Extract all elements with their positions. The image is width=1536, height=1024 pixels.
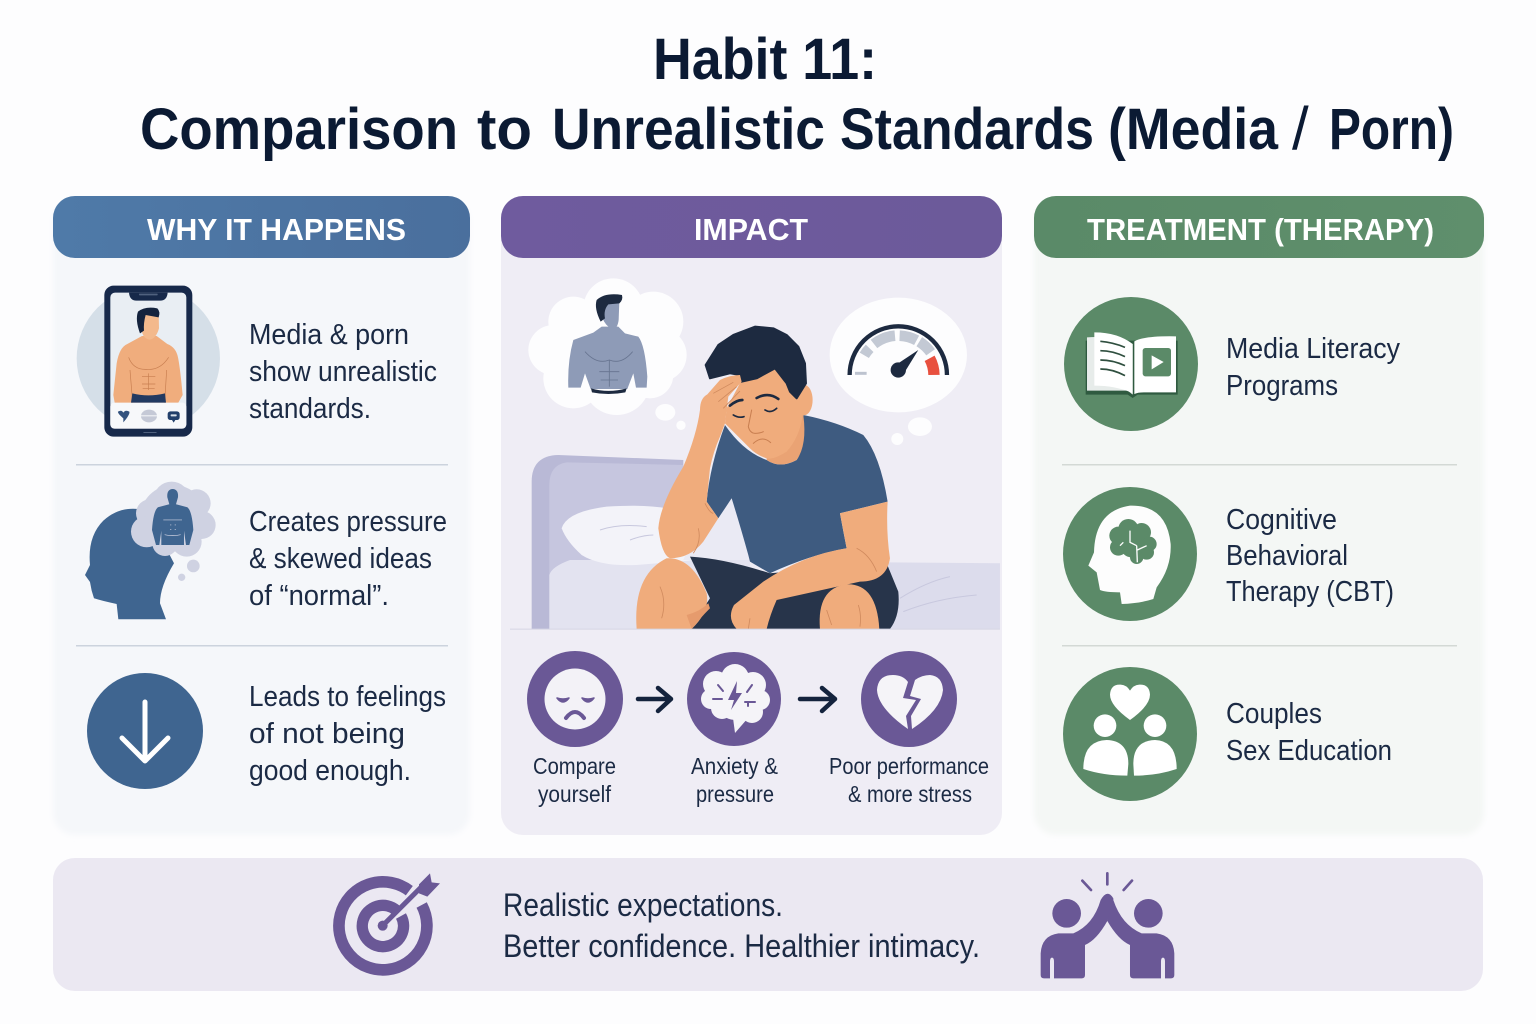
text: couples sex education xyxy=(1226,698,1392,767)
sequence: compare yourself: Compare xyxy=(533,753,616,779)
panel: outcome banner xyxy=(53,858,1483,991)
heading: treatment: TREATMENT (THERAPY) xyxy=(1087,212,1434,247)
icon: high five xyxy=(1041,873,1174,978)
title: Standards xyxy=(840,97,1094,162)
sequence: compare yourself: yourself xyxy=(538,781,612,807)
arrow xyxy=(638,688,671,711)
man: arm holding head xyxy=(658,375,742,558)
sequence: poor performance: Poor performance xyxy=(829,753,989,779)
sequence: anxiety and pressure: pressure xyxy=(696,781,774,807)
text: creates pressure xyxy=(249,506,447,612)
panel: impact xyxy=(501,196,1002,835)
title: (Media xyxy=(1108,97,1279,162)
title xyxy=(140,27,1454,162)
divider xyxy=(1062,645,1457,646)
text: cbt: Cognitive xyxy=(1226,504,1337,536)
icon: couple with heart xyxy=(1063,667,1197,801)
man: head xyxy=(706,327,813,464)
title: to xyxy=(477,97,532,162)
title: Habit 11: xyxy=(653,27,877,92)
arrow xyxy=(800,688,835,711)
sequence: anxiety and pressure: Anxiety & xyxy=(691,753,778,779)
heading: impact xyxy=(501,196,1002,258)
text: leads to feelings: good enough. xyxy=(249,755,411,787)
text: leads to feelings xyxy=(249,681,446,787)
title: Comparison xyxy=(140,97,458,162)
man: shirt xyxy=(707,415,888,573)
thought bubble: ideal body xyxy=(528,278,687,430)
text: leads to feelings: Leads to feelings xyxy=(249,681,446,713)
text: cbt xyxy=(1226,504,1394,608)
man: legs and shorts xyxy=(636,557,899,629)
heading: impact: IMPACT xyxy=(694,212,808,247)
divider xyxy=(1062,464,1457,466)
icon: target with arrow xyxy=(339,873,440,970)
title: Unrealistic xyxy=(552,97,825,162)
text: creates pressure: of “normal”. xyxy=(249,580,389,612)
panel: treatment xyxy=(1034,196,1484,835)
text: media and porn: show unrealistic xyxy=(249,356,437,388)
text: media and porn: Media & porn xyxy=(249,319,409,351)
text: outcome: Realistic expectations. xyxy=(503,887,783,923)
icon: head with brain xyxy=(1063,487,1197,621)
heading: why it happens: WHY IT HAPPENS xyxy=(147,212,406,247)
text: media and porn xyxy=(249,319,437,425)
text: media and porn: standards. xyxy=(249,393,371,425)
sequence: poor performance: & more stress xyxy=(848,781,972,807)
text: couples sex education: Sex Education xyxy=(1226,735,1392,767)
illustration: stressed man on bed xyxy=(510,278,1000,630)
divider xyxy=(76,645,448,646)
text: media literacy: Programs xyxy=(1226,370,1338,402)
divider xyxy=(76,464,448,466)
text: creates pressure: Creates pressure xyxy=(249,506,447,538)
heading: treatment xyxy=(1034,196,1484,258)
text: cbt: Therapy (CBT) xyxy=(1226,576,1394,608)
text: media literacy: Media Literacy xyxy=(1226,333,1400,365)
icon: down arrow xyxy=(87,673,203,789)
icon: book with video xyxy=(1064,297,1198,431)
sequence: compare yourself xyxy=(527,651,623,807)
icon: phone with idealised body xyxy=(77,286,220,437)
sequence: anxiety and pressure xyxy=(687,652,781,807)
sequence: poor performance xyxy=(829,651,989,807)
thought bubble: performance gauge xyxy=(830,298,967,445)
man: arm on knee xyxy=(731,502,890,629)
text: leads to feelings: of not being xyxy=(249,718,405,750)
text: outcome xyxy=(503,887,980,964)
title: / xyxy=(1292,95,1309,162)
heading: why it happens xyxy=(53,196,470,258)
text: outcome: Better confidence. Healthier intimacy. xyxy=(503,928,980,964)
bed edge xyxy=(510,628,1000,631)
text: creates pressure: & skewed ideas xyxy=(249,543,432,575)
title: Porn) xyxy=(1329,97,1454,162)
icon: head thinking of ideal body xyxy=(85,482,216,619)
text: cbt: Behavioral xyxy=(1226,540,1348,572)
text: media literacy xyxy=(1226,333,1400,402)
panel: why it happens xyxy=(53,196,470,835)
bed xyxy=(532,455,1000,629)
text: couples sex education: Couples xyxy=(1226,698,1322,730)
